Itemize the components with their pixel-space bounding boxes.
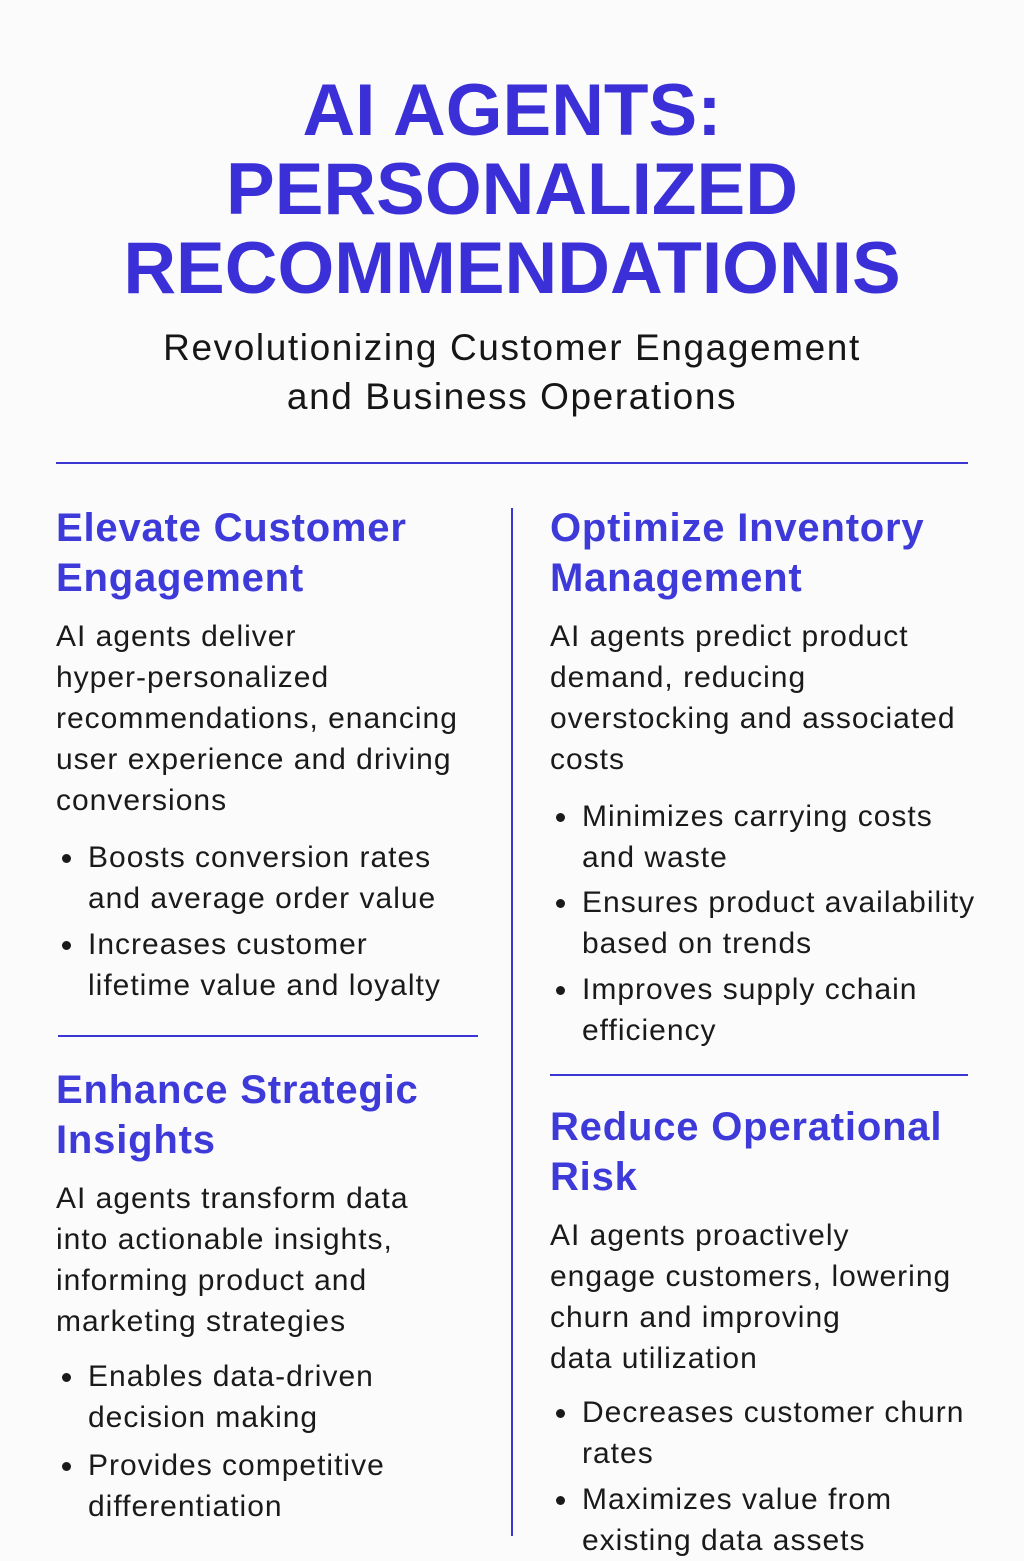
title: RECOMMENDATIONIS: [123, 228, 901, 309]
subtitle: Revolutionizing Customer Engagement: [163, 327, 861, 368]
bullets: enhance: decision making: [88, 1401, 318, 1434]
panel: elevate customer engagement: [56, 506, 458, 1002]
bullets: optimize: based on trends: [582, 927, 812, 960]
panel: enhance strategic insights: [56, 1068, 419, 1523]
bullets: optimize: Improves supply cchain: [582, 973, 917, 1006]
bullets: elevate: Increases customer: [88, 928, 368, 961]
heading: reduce: Reduce Operational: [550, 1105, 942, 1149]
body: elevate: conversions: [56, 784, 227, 817]
body: enhance: informing product and: [56, 1264, 367, 1297]
heading: reduce: [550, 1105, 942, 1199]
body: enhance: into actionable insights,: [56, 1223, 393, 1256]
bullets: elevate: [62, 841, 441, 1002]
bullets: elevate: Boosts conversion rates: [88, 841, 431, 874]
body: reduce: churn and improving: [550, 1301, 841, 1334]
panel: optimize inventory management: [550, 506, 975, 1047]
title: [123, 70, 901, 309]
body: elevate: recommendations, enancing: [56, 702, 458, 735]
body: optimize: AI agents predict product: [550, 620, 909, 653]
heading: elevate: Engagement: [56, 556, 304, 600]
subtitle: and Business Operations: [287, 376, 737, 417]
body: elevate: AI agents deliver: [56, 620, 296, 653]
panel: reduce operational risk: [550, 1105, 964, 1557]
title: PERSONALIZED: [226, 149, 798, 230]
bullets: reduce: existing data assets: [582, 1524, 865, 1557]
body: reduce: [550, 1219, 951, 1375]
subtitle: [163, 327, 861, 417]
bullets: optimize: Ensures product availability: [582, 886, 975, 919]
heading: reduce: Risk: [550, 1155, 638, 1199]
bullets: optimize: efficiency: [582, 1014, 717, 1047]
bullets: reduce: [556, 1396, 964, 1557]
bullets: reduce: rates: [582, 1437, 654, 1470]
body: optimize: overstocking and associated: [550, 702, 956, 735]
heading: optimize: Optimize Inventory: [550, 506, 924, 550]
bullets: optimize: Minimizes carrying costs: [582, 800, 933, 833]
body: reduce: data utilization: [550, 1342, 758, 1375]
body: enhance: marketing strategies: [56, 1305, 346, 1338]
bullets: reduce: Decreases customer churn: [582, 1396, 964, 1429]
heading: enhance: [56, 1068, 419, 1162]
body: optimize: [550, 620, 956, 776]
bullets: enhance: Provides competitive: [88, 1449, 385, 1482]
heading: optimize: [550, 506, 924, 600]
body: elevate: hyper-personalized: [56, 661, 329, 694]
body: elevate: [56, 620, 458, 817]
bullets: enhance: Enables data-driven: [88, 1360, 374, 1393]
body: optimize: costs: [550, 743, 625, 776]
bullets: optimize: and waste: [582, 841, 728, 874]
body: reduce: engage customers, lowering: [550, 1260, 951, 1293]
title: AI AGENTS:: [302, 70, 722, 151]
bullets: enhance: [62, 1360, 385, 1523]
body: enhance: AI agents transform data: [56, 1182, 409, 1215]
bullets: elevate: lifetime value and loyalty: [88, 969, 441, 1002]
heading: enhance: Insights: [56, 1118, 216, 1162]
bullets: elevate: and average order value: [88, 882, 436, 915]
bullets: enhance: differentiation: [88, 1490, 283, 1523]
body: reduce: AI agents proactively: [550, 1219, 849, 1252]
body: enhance: [56, 1182, 409, 1338]
bullets: optimize: [556, 800, 975, 1047]
heading: elevate: [56, 506, 407, 600]
bullets: reduce: Maximizes value from: [582, 1483, 892, 1516]
body: optimize: demand, reducing: [550, 661, 806, 694]
heading: optimize: Management: [550, 556, 802, 600]
body: elevate: user experience and driving: [56, 743, 452, 776]
heading: enhance: Enhance Strategic: [56, 1068, 419, 1112]
heading: elevate: Elevate Customer: [56, 506, 407, 550]
